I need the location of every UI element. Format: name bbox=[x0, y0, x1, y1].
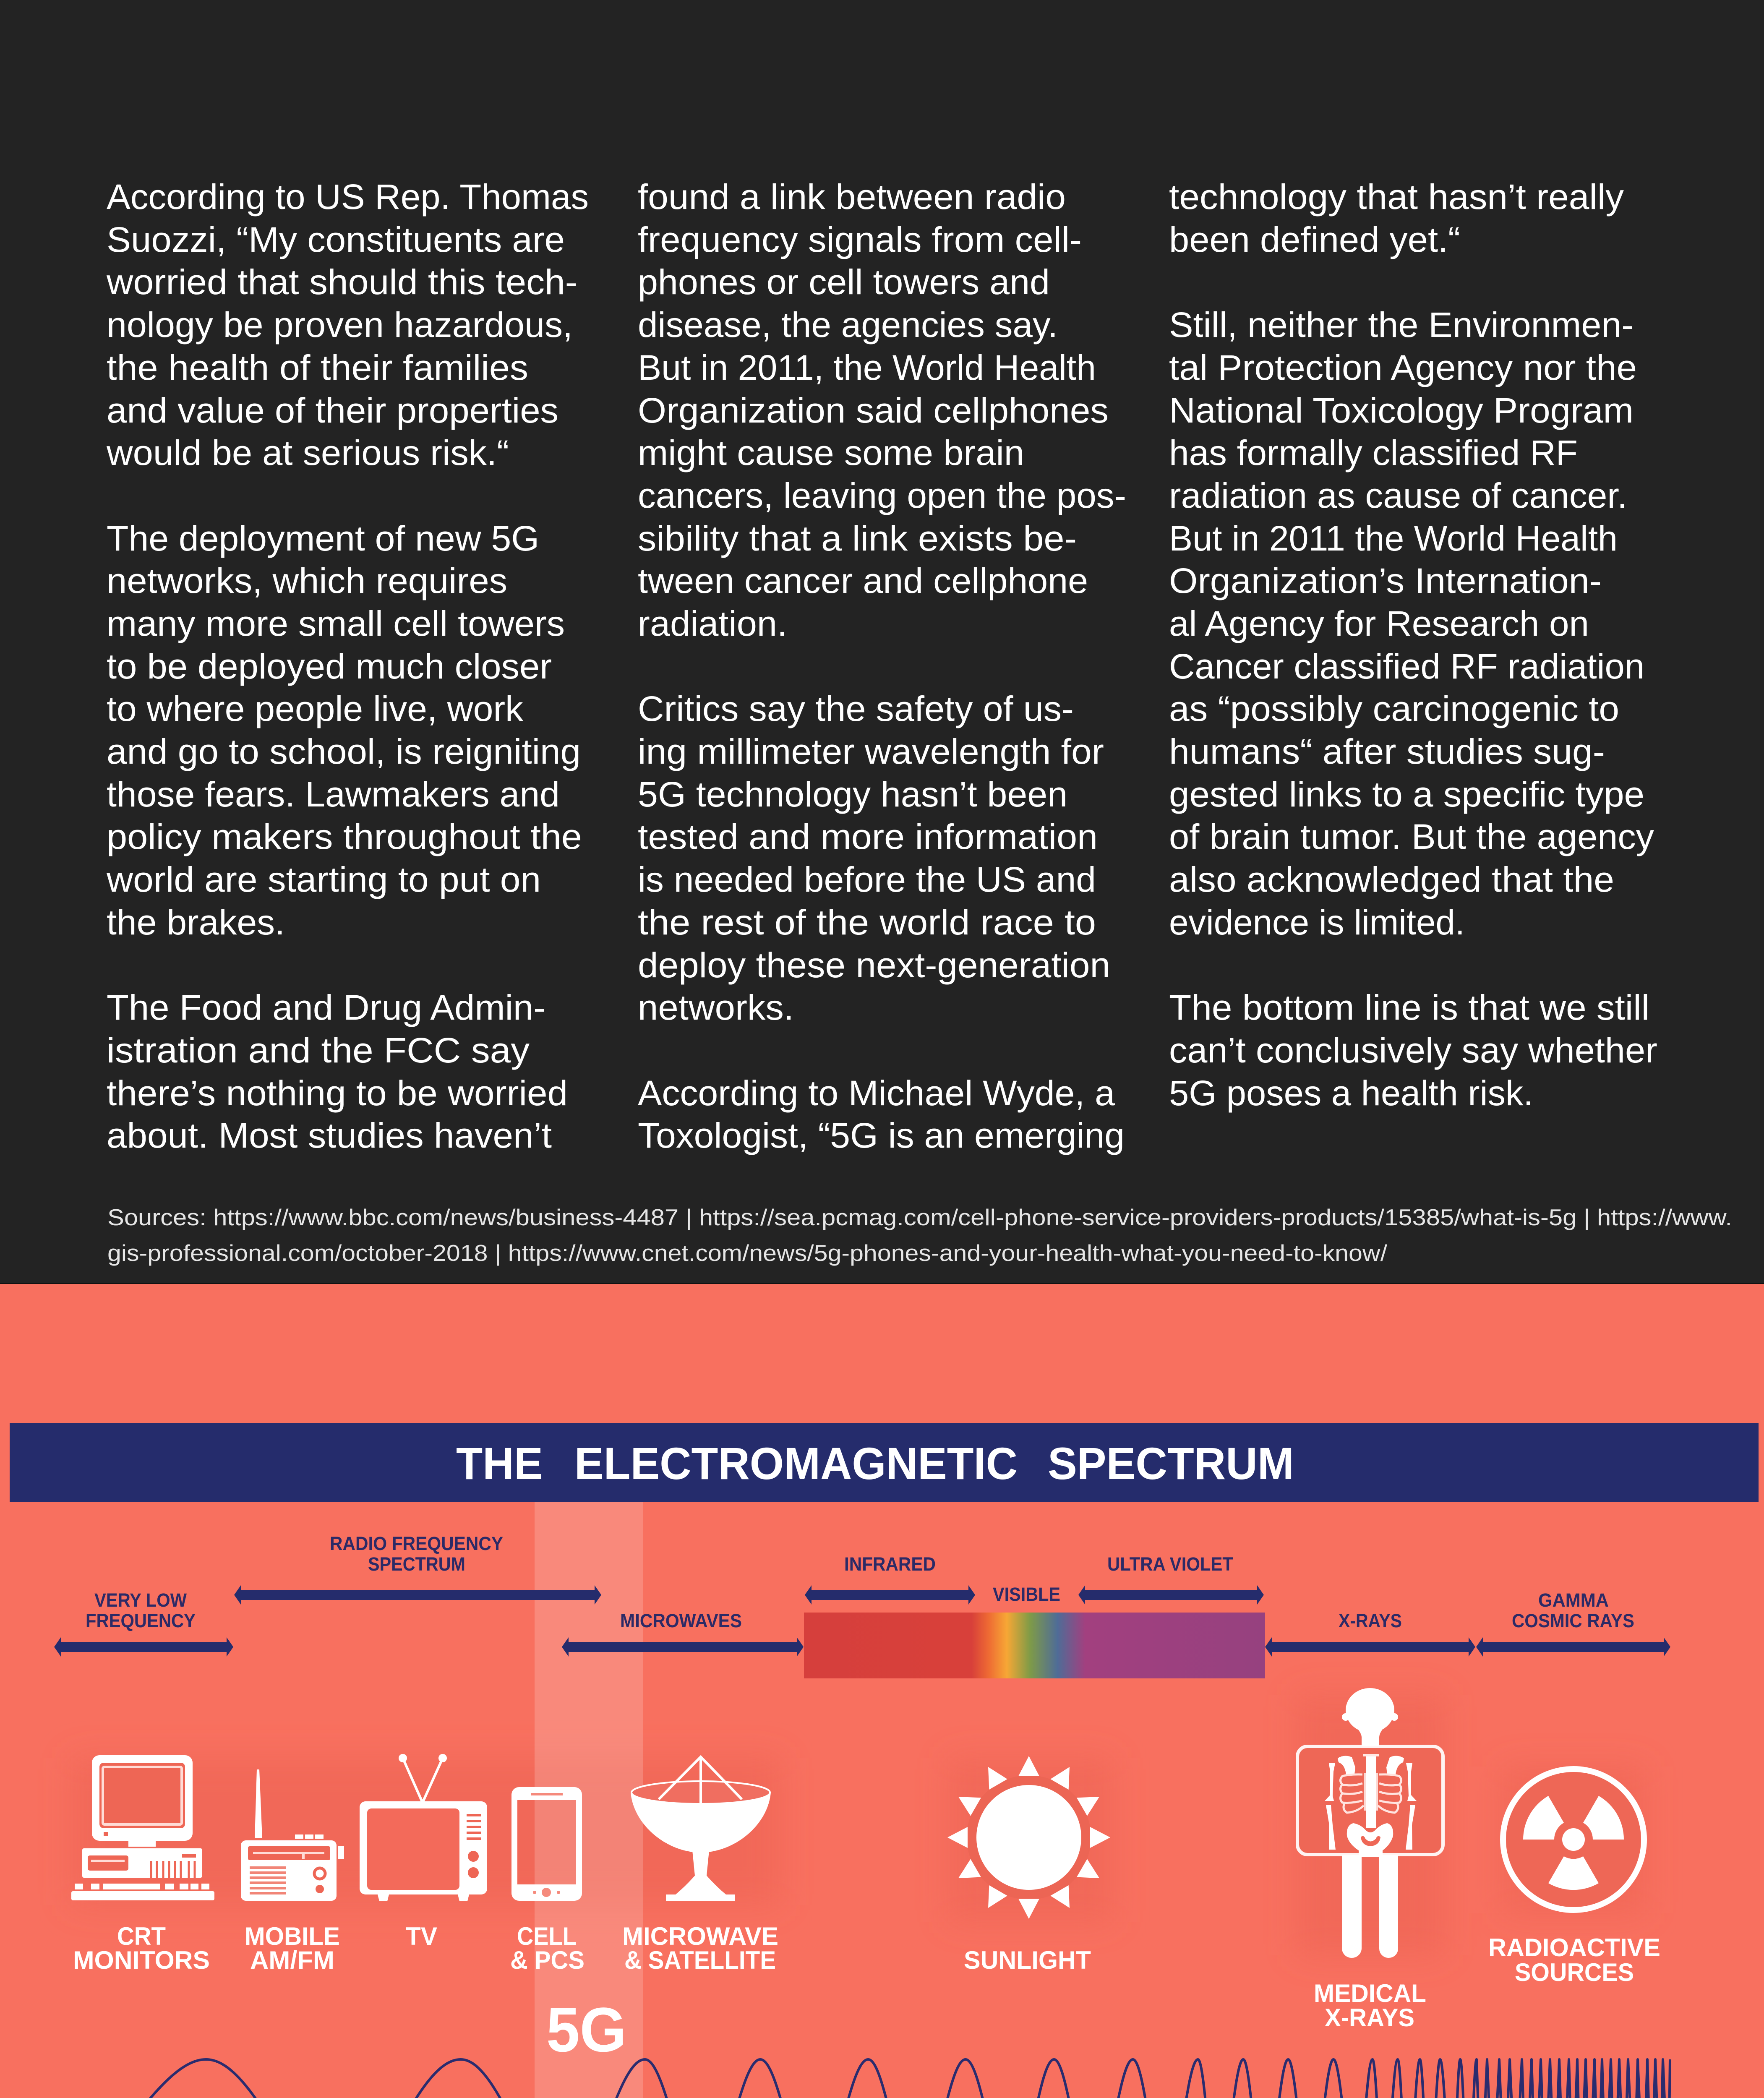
text column 2: But in 2011, the World Health bbox=[638, 348, 1096, 387]
title banner: SPECTRUM bbox=[1048, 1438, 1294, 1489]
icon labels: TV bbox=[406, 1922, 437, 1950]
arrow: microwaves bbox=[562, 1637, 804, 1657]
text column 3: evidence is limited. bbox=[1169, 903, 1465, 942]
band labels: VERY LOW bbox=[94, 1589, 187, 1611]
icon labels: X-RAYS bbox=[1325, 2004, 1414, 2032]
text column 2: tween cancer and cellphone bbox=[638, 561, 1088, 600]
icon labels: SUNLIGHT bbox=[964, 1946, 1091, 1974]
text column 1: many more small cell towers bbox=[107, 604, 565, 643]
text column 1: to be deployed much closer bbox=[107, 647, 552, 686]
icon labels: RADIOACTIVE bbox=[1488, 1934, 1660, 1962]
icon labels: MEDICAL bbox=[1314, 1979, 1426, 2007]
title banner: ELECTROMAGNETIC bbox=[574, 1438, 1018, 1489]
text column 3: also acknowledged that the bbox=[1169, 860, 1614, 899]
text column 2: found a link between radio bbox=[638, 177, 1066, 217]
text column 2: ing millimeter wavelength for bbox=[638, 732, 1104, 771]
arrow: x-rays bbox=[1265, 1637, 1475, 1657]
skeleton bbox=[1325, 1754, 1417, 1857]
ribs bbox=[1340, 1774, 1401, 1813]
arrow: infrared bbox=[805, 1585, 975, 1605]
text column 2: frequency signals from cell- bbox=[638, 220, 1082, 259]
5G label: 5G bbox=[546, 1994, 626, 2065]
text column 1: worried that should this tech- bbox=[106, 262, 577, 302]
text column 1: Suozzi, “My constituents are bbox=[107, 220, 565, 259]
text column 2: Toxologist, “5G is an emerging bbox=[638, 1116, 1125, 1155]
icon labels: CRT bbox=[117, 1922, 166, 1950]
arrow: radio frequency spectrum bbox=[234, 1585, 601, 1605]
band labels: COSMIC RAYS bbox=[1512, 1610, 1634, 1631]
text column 1: would be at serious risk.“ bbox=[106, 433, 509, 472]
text column 2: networks. bbox=[638, 988, 794, 1027]
text column 2: the rest of the world race to bbox=[638, 903, 1096, 942]
band labels: VISIBLE bbox=[993, 1584, 1060, 1605]
text column 2: phones or cell towers and bbox=[638, 262, 1050, 302]
text column 1: policy makers throughout the bbox=[107, 817, 582, 856]
band labels: MICROWAVES bbox=[620, 1610, 742, 1631]
text column 1: there’s nothing to be worried bbox=[107, 1073, 568, 1113]
band labels: SPECTRUM bbox=[368, 1553, 465, 1575]
icon: TV bbox=[360, 1754, 487, 1901]
text column 3: al Agency for Research on bbox=[1169, 604, 1589, 643]
text column 1: and value of their properties bbox=[107, 391, 558, 430]
text column 3: Organization’s Internation- bbox=[1169, 561, 1602, 600]
text column 3: tal Protection Agency nor the bbox=[1169, 348, 1637, 387]
text column 3: can’t conclusively say whether bbox=[1169, 1031, 1657, 1070]
icon: radiation symbol bbox=[1503, 1769, 1644, 1910]
text column 2: According to Michael Wyde, a bbox=[638, 1073, 1115, 1113]
text column 3: technology that hasn’t really bbox=[1169, 177, 1624, 217]
text column 2: disease, the agencies say. bbox=[638, 305, 1058, 344]
text column 2: might cause some brain bbox=[638, 433, 1024, 472]
5G highlight band bbox=[535, 1502, 643, 2098]
icon: satellite dish bbox=[631, 1757, 771, 1901]
text column 1: nology be proven hazardous, bbox=[107, 305, 573, 344]
text column 1: the brakes. bbox=[107, 903, 285, 942]
text column 2: radiation. bbox=[638, 604, 787, 643]
text column 1: The Food and Drug Admin- bbox=[107, 988, 545, 1027]
band labels: RADIO FREQUENCY bbox=[330, 1533, 503, 1554]
sources text: gis-professional.com/october-2018 | https://www.cnet.com/news/5g-phones-and-your-health-what-you-need-to-know/ bbox=[107, 1240, 1388, 1266]
text column 3: But in 2011 the World Health bbox=[1169, 519, 1618, 558]
band labels: ULTRA VIOLET bbox=[1107, 1553, 1233, 1575]
text column 2: deploy these next-generation bbox=[638, 945, 1110, 985]
text column 2: Critics say the safety of us- bbox=[638, 689, 1074, 728]
band labels: INFRARED bbox=[844, 1553, 936, 1575]
icon: sun bbox=[947, 1756, 1110, 1919]
text column 3: The bottom line is that we still bbox=[1169, 988, 1649, 1027]
text column 1: those fears. Lawmakers and bbox=[107, 775, 560, 814]
band labels bbox=[86, 1533, 1634, 1631]
text column 2 bbox=[638, 177, 1126, 1155]
text column 1: the health of their families bbox=[107, 348, 528, 387]
text column 3: has formally classified RF bbox=[1169, 433, 1578, 472]
text column 1: and go to school, is reigniting bbox=[107, 732, 581, 771]
text column 3: radiation as cause of cancer. bbox=[1169, 476, 1627, 515]
icon labels: & SATELLITE bbox=[624, 1946, 776, 1974]
text column 3: Cancer classified RF radiation bbox=[1169, 647, 1644, 686]
text column 3: as “possibly carcinogenic to bbox=[1169, 689, 1619, 728]
visible spectrum gradient bar bbox=[804, 1613, 1265, 1678]
text column 3: National Toxicology Program bbox=[1169, 391, 1634, 430]
sources text bbox=[107, 1204, 1732, 1266]
icon labels: & PCS bbox=[510, 1946, 585, 1974]
wave chart: increasing frequency bbox=[53, 2059, 1670, 2098]
text column 2: 5G technology hasn’t been bbox=[638, 775, 1067, 814]
panel: electromagnetic spectrum infographic bbox=[0, 1283, 1764, 2098]
sources text: Sources: https://www.bbc.com/news/business-4487 | https://sea.pcmag.com/cell-phone-service-providers-products/15385/what-is-5g | https://www. bbox=[107, 1204, 1732, 1230]
icon: x-ray person bbox=[1297, 1688, 1443, 1958]
text column 3: been defined yet.“ bbox=[1169, 220, 1460, 259]
icon labels: SOURCES bbox=[1515, 1958, 1634, 1986]
arrow: gamma cosmic rays bbox=[1476, 1637, 1670, 1657]
icon: phone bbox=[511, 1787, 582, 1901]
title banner bbox=[10, 1423, 1759, 1502]
panel: article text on dark background bbox=[0, 0, 1764, 1284]
text column 1: about. Most studies haven’t bbox=[107, 1116, 552, 1155]
text column 1: networks, which requires bbox=[107, 561, 507, 600]
icon labels: MICROWAVE bbox=[622, 1922, 778, 1950]
text column 1: The deployment of new 5G bbox=[107, 519, 539, 558]
text column 2: sibility that a link exists be- bbox=[638, 519, 1077, 558]
text column 1: istration and the FCC say bbox=[107, 1031, 530, 1070]
band labels: X-RAYS bbox=[1339, 1610, 1402, 1631]
text column 3: 5G poses a health risk. bbox=[1169, 1073, 1533, 1113]
text column 3 bbox=[1169, 177, 1657, 1113]
text column 3: of brain tumor. But the agency bbox=[1169, 817, 1654, 856]
arrow: very low frequency bbox=[54, 1637, 233, 1657]
icon labels: MONITORS bbox=[73, 1946, 210, 1974]
icon labels: CELL bbox=[517, 1922, 577, 1950]
arrow: ultra violet bbox=[1078, 1585, 1264, 1605]
text column 1: world are starting to put on bbox=[106, 860, 541, 899]
title banner: THE bbox=[456, 1438, 543, 1489]
text column 2: tested and more information bbox=[638, 817, 1098, 856]
icon: radio bbox=[241, 1769, 344, 1901]
text column 3: Still, neither the Environmen- bbox=[1169, 305, 1634, 344]
text column 2: Organization said cellphones bbox=[638, 391, 1109, 430]
icon: CRT monitor computer bbox=[71, 1755, 214, 1900]
text column 2: is needed before the US and bbox=[638, 860, 1096, 899]
text column 1: According to US Rep. Thomas bbox=[107, 177, 589, 217]
icon labels: MOBILE bbox=[245, 1922, 340, 1950]
text column 3: gested links to a specific type bbox=[1169, 775, 1644, 814]
text column 3: humans“ after studies sug- bbox=[1169, 732, 1605, 771]
band labels: GAMMA bbox=[1538, 1589, 1609, 1611]
text column 2: cancers, leaving open the pos- bbox=[638, 476, 1126, 515]
icon labels bbox=[73, 1922, 1660, 2032]
band labels: FREQUENCY bbox=[86, 1610, 196, 1631]
text column 1: to where people live, work bbox=[107, 689, 524, 728]
text column 1 bbox=[106, 177, 589, 1155]
icon labels: AM/FM bbox=[250, 1946, 334, 1974]
